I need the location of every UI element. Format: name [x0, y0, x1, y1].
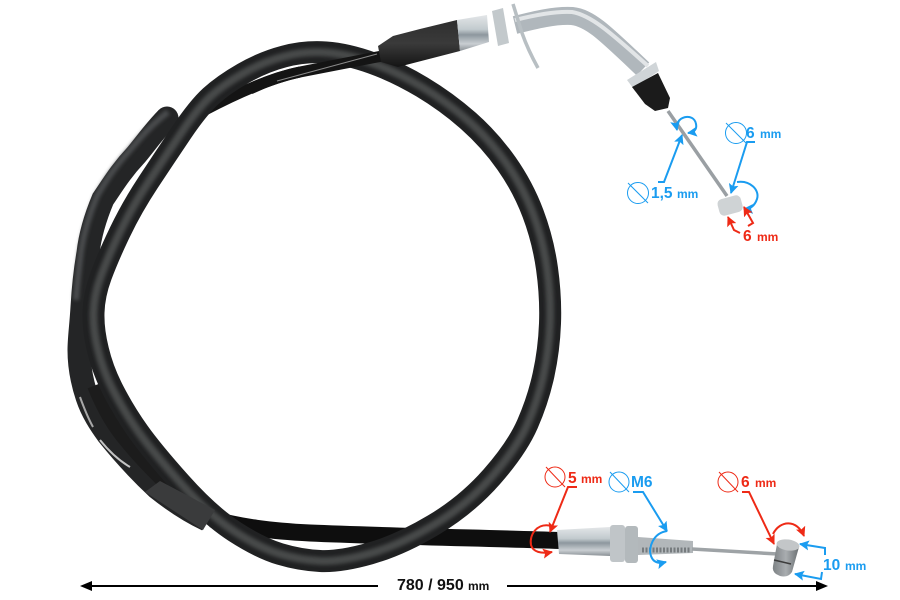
annotation: 6 mm barrel diameter (red): mm [755, 476, 776, 490]
inner wire [692, 549, 778, 554]
annotation: 6 mm nipple diameter (blue): 6 [746, 125, 755, 142]
end barrel [773, 544, 799, 576]
cable: sleeve lower end with worn glints [80, 397, 215, 530]
hex ferrule [557, 527, 610, 556]
annotation: 10 mm barrel length: 10 [823, 557, 840, 574]
annotation: M6 thread size: M6 [631, 474, 653, 491]
black tip [632, 73, 670, 111]
cable: hidden part of thin run behind loop [205, 72, 300, 110]
annotation: 5 mm red housing diameter: 5 [568, 470, 577, 487]
threaded rod [638, 537, 693, 555]
rubber boot [378, 20, 460, 67]
cable: protective sleeve on left side [76, 106, 207, 520]
annotation: 10 mm barrel length [795, 544, 866, 579]
inner wire [668, 111, 727, 196]
annotation: 10 mm barrel length: mm [845, 559, 866, 573]
annotation: 6 mm barrel diameter (red) [718, 472, 804, 544]
lower fitting: adjuster with lock nuts and thread [557, 525, 800, 576]
total length dimension arrow: mm [468, 579, 489, 593]
tube collar [627, 62, 659, 88]
annotation: 5 mm red housing diameter [531, 467, 602, 553]
annotation: 6 mm barrel diameter (red): 6 [741, 474, 750, 491]
bracket washer [513, 4, 538, 68]
annotation: 1,5 mm wire diameter: mm [677, 187, 698, 201]
annotation: 6 mm nipple length (red): 6 [743, 228, 752, 245]
cable: outer loop housing [93, 52, 550, 561]
total length dimension arrow [80, 577, 828, 594]
cable: thin run to upper rubber boot [250, 54, 382, 89]
annotation: 1,5 mm wire diameter [628, 117, 698, 204]
lock nut [492, 8, 509, 46]
annotation: 6 mm nipple length (red): mm [757, 230, 778, 244]
total length dimension arrow: 780 / 950 [397, 577, 464, 594]
annotation: 6 mm nipple length (red) [728, 207, 778, 245]
annotation: 1,5 mm wire diameter: 1,5 [651, 185, 673, 202]
upper fitting: rubber boot, nut and bent chrome tube [378, 4, 744, 217]
hex ferrule [457, 15, 489, 51]
bent tube [515, 16, 643, 69]
annotation: 5 mm red housing diameter: mm [581, 472, 602, 486]
annotation: 6 mm nipple diameter (blue): mm [760, 127, 781, 141]
end nipple [716, 194, 744, 217]
annotation: M6 thread size [609, 472, 667, 563]
annotation: 6 mm nipple diameter (blue) [726, 122, 781, 209]
lock nuts [610, 525, 625, 562]
cable: inner black run from lower ferrule to sleeve [212, 519, 560, 540]
